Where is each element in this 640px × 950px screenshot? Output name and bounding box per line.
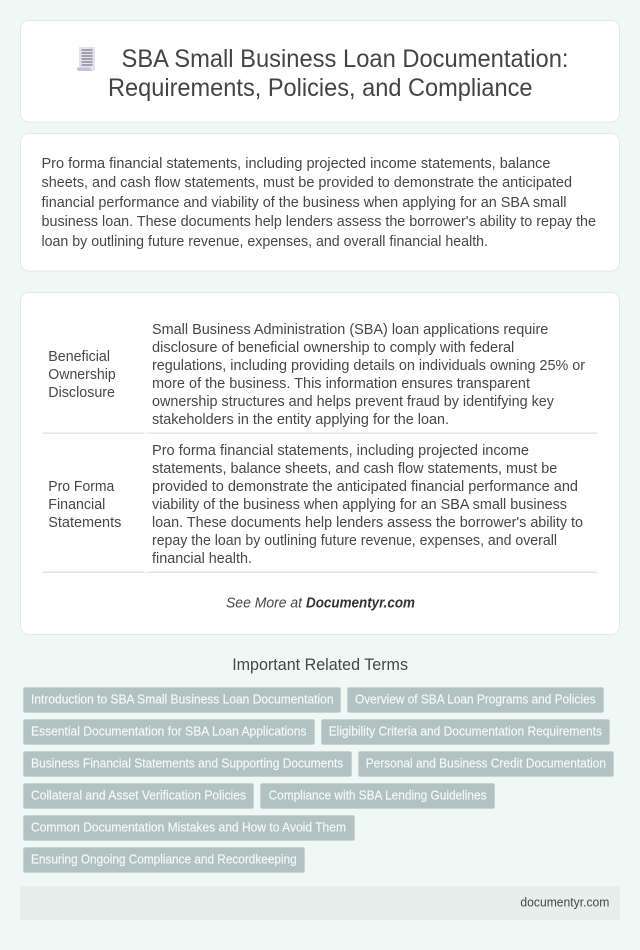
heading: important related terms: Important Related Terms — [232, 656, 408, 674]
title: Requirements, Policies, and Compliance — [108, 74, 532, 102]
footer — [20, 886, 620, 920]
chip — [24, 784, 254, 808]
row: beneficial ownership disclosure — [43, 322, 597, 434]
title — [108, 45, 568, 102]
chip — [24, 752, 352, 776]
row description: loan. These documents help lenders assess the borrower's ability to — [152, 515, 583, 531]
chip — [24, 848, 304, 872]
text block: summary — [42, 156, 596, 250]
row description: disclosure of beneficial ownership to comply with federal — [152, 340, 514, 356]
panel: related term chips — [24, 688, 614, 872]
chip: Collateral and Asset Verification Policies — [31, 788, 246, 802]
row description: ownership structures and helps prevent fraud by identifying key — [152, 394, 555, 410]
row description: provided to demonstrate the anticipated financial performance and — [152, 479, 578, 495]
row label: Pro Forma — [48, 479, 114, 495]
text block: summary: sheets, and cash flow statements, must be provided to demonstrate the anticipated — [42, 175, 572, 191]
text block: summary: loan by outlining future revenue, expenses, and overall financial health. — [42, 234, 488, 250]
chip: Business Financial Statements and Supporting Documents — [31, 756, 343, 770]
text block: summary: Pro forma financial statements, including projected income statements, balance — [42, 156, 550, 172]
row description: more of the business. This information ensures transparent — [152, 376, 530, 392]
chip: Ensuring Ongoing Compliance and Recordkeeping — [31, 852, 297, 866]
chip — [24, 816, 354, 840]
row label: Ownership — [48, 367, 116, 383]
panel: documentation table — [20, 292, 620, 634]
panel: summary paragraph — [20, 134, 620, 271]
row label: Financial — [48, 497, 105, 513]
icon: document scroll — [77, 47, 95, 71]
row description: statements, balance sheets, and cash flow statements, must be — [152, 461, 557, 477]
chip — [24, 720, 314, 744]
row description: regulations, including providing details on individuals owning 25% or — [152, 358, 585, 374]
row description: Small Business Administration (SBA) loan applications require — [152, 322, 548, 338]
footer: documentyr.com — [520, 896, 609, 910]
chip — [322, 720, 610, 744]
link: see more: Documentyr.com — [306, 596, 415, 612]
text block: summary: business loan. These documents help lenders assess the borrower's ability to repay the — [42, 214, 596, 230]
row description — [152, 443, 583, 567]
link: see more — [226, 596, 415, 612]
chip: Overview of SBA Loan Programs and Policies — [355, 692, 596, 706]
row description — [152, 322, 585, 428]
chip — [260, 784, 494, 808]
chip — [358, 752, 614, 776]
chip: Compliance with SBA Lending Guidelines — [269, 788, 486, 802]
link: see more: See More at — [226, 596, 303, 612]
chip: Introduction to SBA Small Business Loan Documentation — [31, 692, 334, 706]
row description: Pro forma financial statements, including projected income — [152, 443, 529, 459]
row label: Beneficial — [48, 349, 110, 365]
chip: Personal and Business Credit Documentation — [366, 756, 606, 770]
chip — [348, 688, 604, 712]
row label: Disclosure — [48, 385, 115, 401]
row description: viability of the business when applying for an SBA small business — [152, 497, 567, 513]
text block: summary: financial performance and viability of the business when applying for an SBA small — [42, 195, 566, 211]
chip: Common Documentation Mistakes and How to Avoid Them — [31, 820, 346, 834]
chip — [24, 688, 340, 712]
panel: header — [20, 20, 620, 122]
title: SBA Small Business Loan Documentation: — [122, 45, 568, 73]
row: pro forma financial statements — [43, 443, 597, 573]
chip: Essential Documentation for SBA Loan Applications — [31, 724, 306, 738]
row description: financial health. — [152, 551, 252, 567]
chip: Eligibility Criteria and Documentation Requirements — [329, 724, 602, 738]
row label — [48, 479, 121, 531]
row description: stakeholders in the entity applying for the loan. — [152, 412, 449, 428]
row label: Statements — [48, 515, 121, 531]
row description: repay the loan by outlining future revenue, expenses, and overall — [152, 533, 557, 549]
row label — [48, 349, 116, 401]
